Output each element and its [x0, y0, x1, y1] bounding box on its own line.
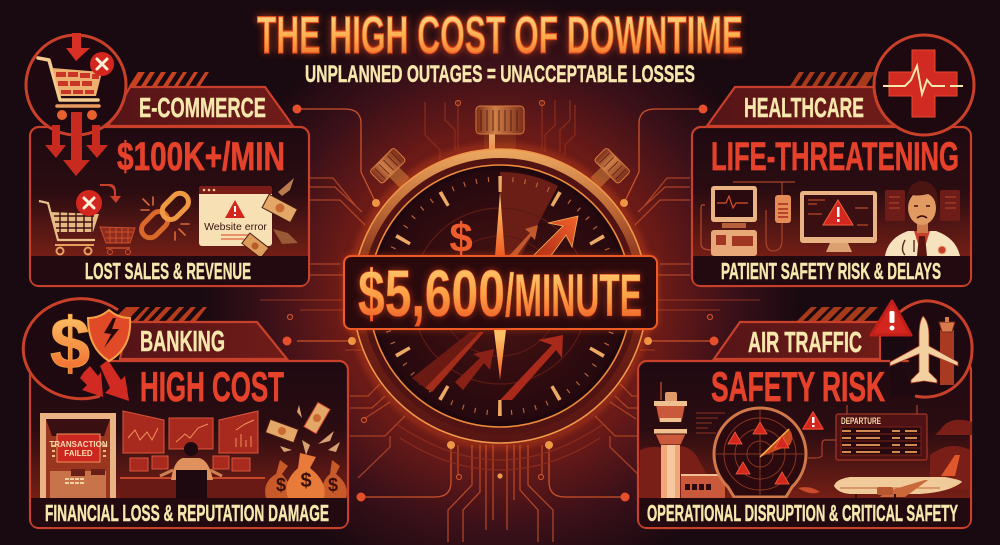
icon: abandoned carts [39, 184, 135, 254]
tab stripes [797, 307, 878, 321]
icon: flying money [242, 178, 298, 258]
icon: right crown [583, 147, 631, 195]
icon: broken chain [138, 190, 192, 241]
panel: healthcare [692, 35, 974, 286]
icon: dollar in dial: $ [449, 214, 473, 261]
needle [494, 192, 506, 380]
icon: money bags: $ [328, 475, 338, 495]
footer band [639, 498, 970, 527]
icon: warning triangle [803, 412, 823, 429]
icon: control tower [654, 382, 725, 498]
tab [120, 322, 287, 359]
card body [30, 127, 309, 286]
icon: money bags: $ [276, 475, 286, 495]
icon: top crown [476, 106, 524, 152]
icon: plane, tower and warning [871, 301, 972, 397]
tab stripes [129, 72, 209, 86]
caption: LOST SALES & REVENUE [85, 258, 251, 284]
headline: $100K+/MIN [117, 135, 285, 179]
tab stripes [790, 72, 875, 86]
panel: e-commerce [26, 33, 309, 286]
caption: FINANCIAL LOSS & REPUTATION DAMAGE [45, 500, 329, 526]
value banner: /MINUTE [505, 262, 642, 329]
clouds [640, 420, 972, 498]
tab stripes [112, 307, 207, 321]
icon: ATM transaction failed [40, 413, 116, 498]
panel: banking [23, 299, 348, 528]
headline: SAFETY RISK [711, 363, 885, 410]
footer band [31, 498, 347, 527]
value banner: $5,600 [358, 256, 505, 330]
label: BANKING [140, 326, 225, 358]
headline: HIGH COST [140, 363, 284, 410]
icon: ATM transaction failed: FAILED [64, 449, 93, 458]
tab [108, 87, 293, 126]
footer band [31, 256, 308, 285]
title [257, 6, 743, 65]
card body [30, 361, 348, 528]
icon: money bags: $ [300, 470, 312, 492]
icon: departure board: DEPARTURE [841, 416, 881, 427]
icon: medical cross [874, 35, 974, 135]
icon: patient monitors [701, 182, 795, 256]
value banner: $5,600 [358, 256, 505, 330]
dial face [374, 170, 626, 422]
circuit traces [260, 100, 760, 542]
icon: alert monitor [800, 191, 877, 252]
icon: money bags [265, 402, 347, 498]
subtitle: UNPLANNED OUTAGES = UNACCEPTABLE LOSSES [305, 61, 695, 88]
icon: airliner [798, 455, 962, 498]
icon: website error window: Website error [204, 221, 267, 233]
arrows in dial [412, 216, 578, 400]
icon: left crown [369, 147, 417, 195]
icon: dollar and cracked shield: $ [50, 304, 90, 384]
panel: air traffic [638, 301, 972, 528]
icon: dollar and cracked shield [23, 299, 130, 401]
icon: shopping cart with arrows [26, 33, 126, 176]
label: E-COMMERCE [139, 92, 266, 123]
icon: departure board [808, 405, 927, 460]
icon: doctor [885, 181, 960, 256]
label: HEALTHCARE [744, 92, 864, 123]
tab [707, 87, 900, 126]
icon: trader at monitors [120, 411, 265, 498]
tab [714, 322, 880, 359]
icon: radar [714, 408, 806, 497]
value banner [344, 256, 657, 330]
card body [692, 127, 971, 286]
icon: website error window [199, 186, 272, 246]
card body [638, 361, 971, 528]
footer band [693, 256, 970, 285]
stopwatch [344, 106, 657, 445]
label: AIR TRAFFIC [748, 327, 862, 359]
icon: ATM transaction failed: TRANSACTION [49, 440, 108, 449]
value banner: /MINUTE [505, 262, 642, 329]
